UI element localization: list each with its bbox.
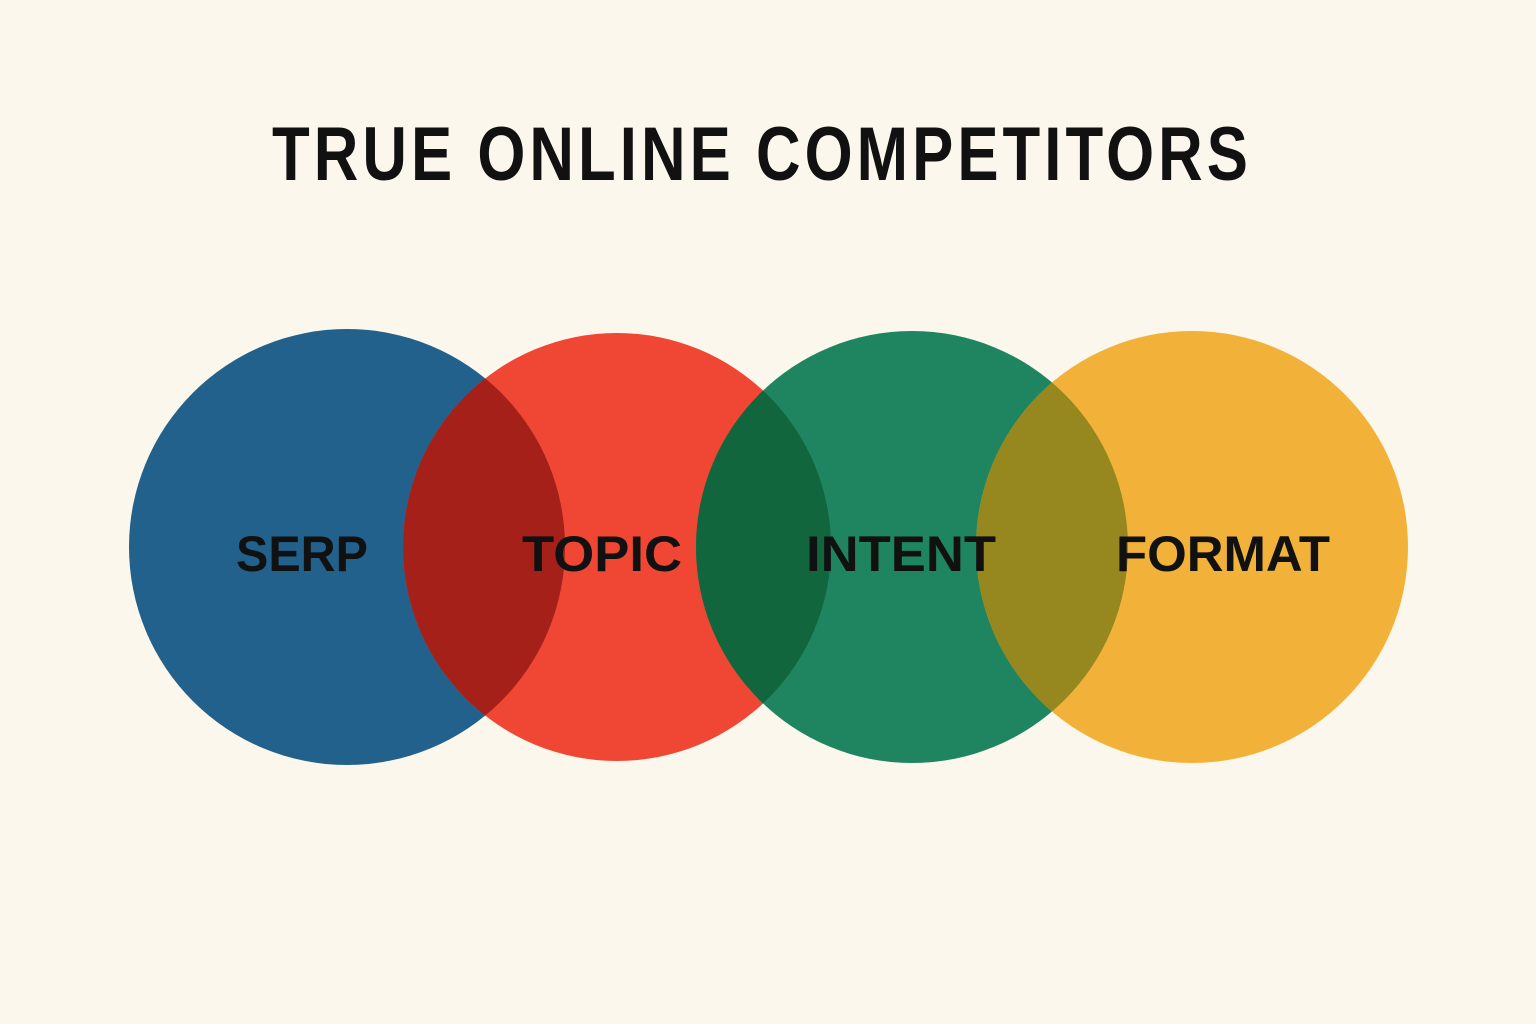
circle: INTENT	[696, 331, 1128, 763]
circle: FORMAT	[976, 331, 1408, 763]
label: INTENT: INTENT	[806, 526, 996, 582]
label: TOPIC: TOPIC	[522, 526, 682, 582]
title: TRUE ONLINE COMPETITORS	[272, 112, 1252, 197]
circle: TOPIC	[403, 333, 831, 761]
circle: SERP	[129, 329, 565, 765]
overlap: TOPIC-INTENT	[696, 390, 831, 704]
label: FORMAT: FORMAT	[1116, 526, 1330, 582]
overlap: INTENT-FORMAT	[976, 382, 1128, 712]
label: SERP: SERP	[236, 526, 368, 582]
venn diagram	[129, 329, 1408, 765]
overlap: SERP-TOPIC	[403, 378, 565, 716]
